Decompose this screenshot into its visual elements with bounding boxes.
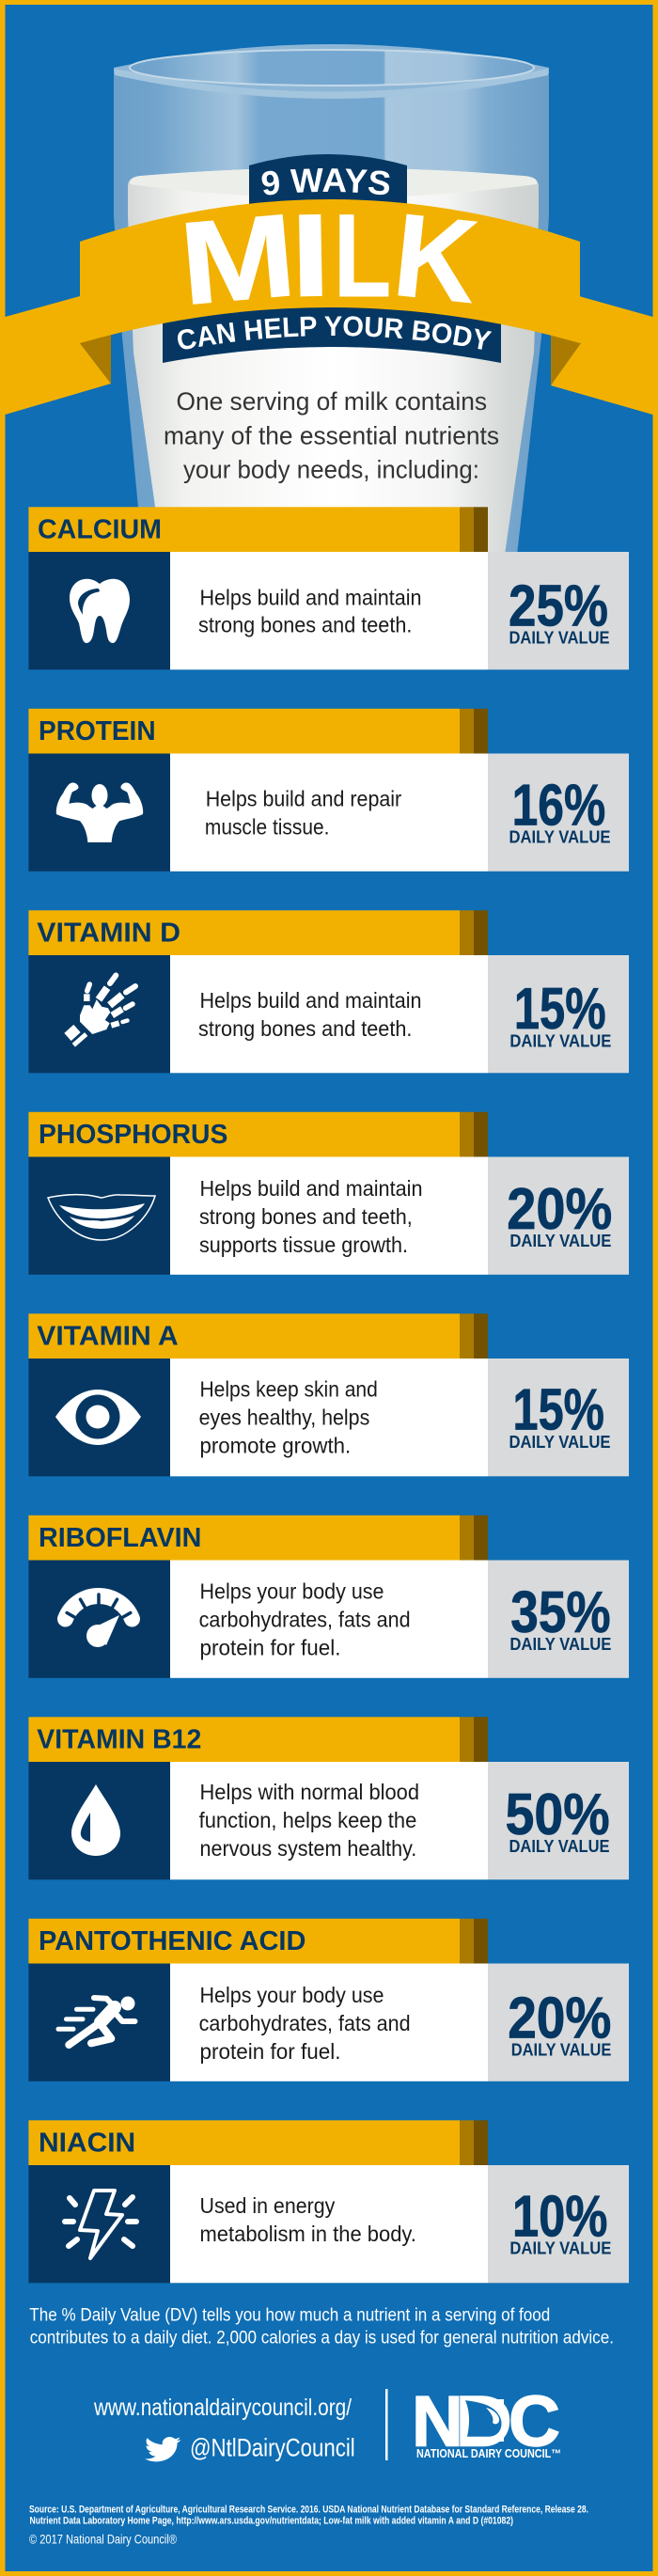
description: vitamin b12: function, helps keep the — [199, 1808, 416, 1832]
daily value: 15%: 15% — [514, 977, 606, 1042]
panel: calcium — [28, 507, 629, 669]
milk word: I — [290, 189, 332, 322]
daily value: 35% — [488, 1561, 629, 1678]
panel: riboflavin — [28, 1516, 629, 1678]
header: vitamin b12: VITAMIN B12 — [37, 1724, 201, 1754]
can help your body band — [163, 301, 501, 363]
header: pantothenic acid — [28, 1919, 488, 1963]
header: riboflavin — [28, 1516, 488, 1561]
glass rim — [114, 44, 549, 99]
daily value: 20% — [488, 1963, 629, 2081]
daily value: 10%: 10% — [512, 2184, 607, 2249]
daily value: 35%: DAILY VALUE — [509, 1635, 611, 1654]
intro text: One serving of milk contains — [177, 387, 487, 416]
daily value: 25%: DAILY VALUE — [509, 629, 609, 648]
header: protein: PROTEIN — [39, 716, 156, 746]
icon: lightning bolt — [28, 2165, 170, 2283]
milk surface — [130, 167, 537, 197]
ribbon banner — [6, 154, 652, 415]
header: pantothenic acid: PANTOTHENIC ACID — [39, 1926, 306, 1956]
daily value: 35%: 35% — [510, 1580, 611, 1645]
daily value: 50%: 50% — [506, 1783, 610, 1847]
icon: eye — [28, 1359, 170, 1476]
daily value: 15%: DAILY VALUE — [509, 1032, 611, 1051]
icon: twitter bird — [145, 2437, 180, 2461]
intro text: your body needs, including: — [183, 456, 479, 484]
panel: vitamin b12 — [28, 1717, 629, 1879]
daily value: 20%: 20% — [508, 1987, 611, 2051]
panel: niacin — [28, 2120, 629, 2283]
description: vitamin a: promote growth. — [199, 1434, 351, 1458]
copyright: © 2017 National Dairy Council® — [29, 2532, 177, 2546]
daily value explanation — [29, 2305, 614, 2348]
description: niacin: metabolism in the body. — [199, 2222, 416, 2246]
header: vitamin b12 — [28, 1717, 488, 1762]
panel: pantothenic acid — [28, 1919, 629, 2081]
description: protein — [170, 754, 488, 872]
header: vitamin a — [28, 1313, 488, 1359]
header: calcium: CALCIUM — [38, 514, 162, 544]
twitter handle: @NtlDairyCouncil — [190, 2434, 355, 2462]
header: vitamin a: VITAMIN A — [37, 1321, 179, 1351]
icon: hand skeleton — [28, 955, 170, 1073]
right ribbon tail — [551, 296, 652, 415]
icon: smile — [28, 1156, 170, 1275]
logo: national dairy council: C — [509, 2382, 560, 2462]
description: phosphorus: Helps build and maintain — [199, 1176, 423, 1201]
left ribbon tail — [6, 296, 111, 415]
milk word: M — [175, 189, 301, 330]
daily value: 20%: DAILY VALUE — [511, 2041, 611, 2060]
daily value: 20%: 20% — [507, 1177, 612, 1242]
description: riboflavin: protein for fuel. — [199, 1636, 340, 1660]
glass of milk illustration — [114, 44, 549, 555]
description: vitamin d: Helps build and maintain — [199, 988, 421, 1013]
panel: phosphorus — [28, 1112, 629, 1275]
header: niacin: NIACIN — [39, 2128, 135, 2158]
daily value: 16%: DAILY VALUE — [509, 828, 611, 847]
milk word: L — [334, 190, 391, 322]
website link: www.nationaldairycouncil.org/ — [93, 2395, 352, 2421]
description: vitamin d: strong bones and teeth. — [198, 1016, 412, 1041]
description: vitamin a — [170, 1359, 488, 1476]
daily value: 50% — [488, 1762, 629, 1879]
description: riboflavin: carbohydrates, fats and — [199, 1608, 411, 1632]
can help your body text: CAN HELP YOUR BODY — [178, 316, 493, 350]
9 ways tab: 9 WAYS — [261, 168, 389, 196]
daily value: 15% — [488, 955, 629, 1073]
description: niacin — [170, 2165, 488, 2283]
description: riboflavin — [170, 1561, 488, 1678]
intro text — [164, 387, 499, 484]
daily value: 15%: DAILY VALUE — [509, 1433, 611, 1452]
header: riboflavin: RIBOFLAVIN — [39, 1523, 201, 1553]
description: niacin: Used in energy — [199, 2193, 336, 2218]
logo: national dairy council: NATIONAL DAIRY COUNCIL™ — [416, 2447, 561, 2460]
logo: national dairy council — [412, 2381, 561, 2462]
ribbon centre — [80, 199, 580, 343]
daily value: 20% — [488, 1156, 629, 1275]
glass body — [114, 68, 549, 555]
header: phosphorus — [28, 1112, 488, 1156]
icon: drop — [28, 1762, 170, 1879]
logo: national dairy council: N — [412, 2382, 463, 2462]
description: vitamin b12 — [170, 1762, 488, 1879]
description: protein: muscle tissue. — [205, 815, 329, 840]
sources — [29, 2505, 588, 2527]
description: pantothenic acid — [170, 1963, 488, 2081]
logo: national dairy council: D — [455, 2381, 512, 2461]
daily value: 10% — [488, 2165, 629, 2283]
icon: tooth — [28, 552, 170, 669]
description: pantothenic acid: protein for fuel. — [199, 2039, 340, 2064]
daily value: 25% — [488, 552, 629, 669]
description: phosphorus — [170, 1156, 488, 1275]
description: vitamin d — [170, 955, 488, 1073]
icon: runner — [28, 1963, 170, 2081]
daily value: 16%: 16% — [512, 774, 605, 839]
description: protein: Helps build and repair — [206, 787, 402, 811]
description: vitamin a: eyes healthy, helps — [199, 1406, 369, 1430]
description: pantothenic acid: Helps your body use — [199, 1983, 384, 2007]
header: vitamin d — [28, 910, 488, 955]
daily value: 50%: DAILY VALUE — [509, 1837, 609, 1856]
icon: flexing muscles — [28, 754, 170, 872]
daily value explanation: The % Daily Value (DV) tells you how much a nutrient in a serving of food — [29, 2305, 550, 2325]
header: niacin — [28, 2120, 488, 2165]
description: vitamin b12: nervous system healthy. — [199, 1836, 416, 1861]
description: riboflavin: Helps your body use — [199, 1579, 384, 1604]
description: pantothenic acid: carbohydrates, fats and — [199, 2011, 411, 2035]
icon: gauge — [28, 1561, 170, 1678]
description: calcium: Helps build and maintain — [199, 585, 421, 609]
daily value: 25%: 25% — [509, 574, 608, 639]
intro text: many of the essential nutrients — [164, 421, 499, 449]
header: phosphorus: PHOSPHORUS — [39, 1120, 227, 1150]
panel: vitamin a — [28, 1313, 629, 1476]
milk word: K — [388, 188, 483, 327]
description: calcium — [170, 552, 488, 669]
daily value: 15%: 15% — [513, 1378, 604, 1443]
description: calcium: strong bones and teeth. — [198, 613, 412, 637]
header: vitamin d: VITAMIN D — [37, 918, 180, 948]
sources: Nutrient Data Laboratory Home Page, http://www.ars.usda.gov/nutrientdata; Low-fat milk with added vitamin A and D (#01082) — [30, 2516, 513, 2527]
panel: protein — [28, 709, 629, 872]
header: protein — [28, 709, 488, 754]
daily value: 10%: DAILY VALUE — [509, 2238, 611, 2257]
description: phosphorus: supports tissue growth. — [199, 1233, 408, 1257]
description: vitamin a: Helps keep skin and — [199, 1377, 378, 1402]
daily value: 16% — [488, 754, 629, 872]
description: phosphorus: strong bones and teeth, — [199, 1204, 413, 1229]
header: calcium — [28, 507, 488, 552]
milk word — [175, 188, 483, 330]
description: vitamin b12: Helps with normal blood — [199, 1780, 419, 1804]
daily value: 15% — [488, 1359, 629, 1476]
panel: vitamin d — [28, 910, 629, 1073]
milk — [128, 167, 539, 555]
daily value: 20%: DAILY VALUE — [509, 1232, 611, 1250]
